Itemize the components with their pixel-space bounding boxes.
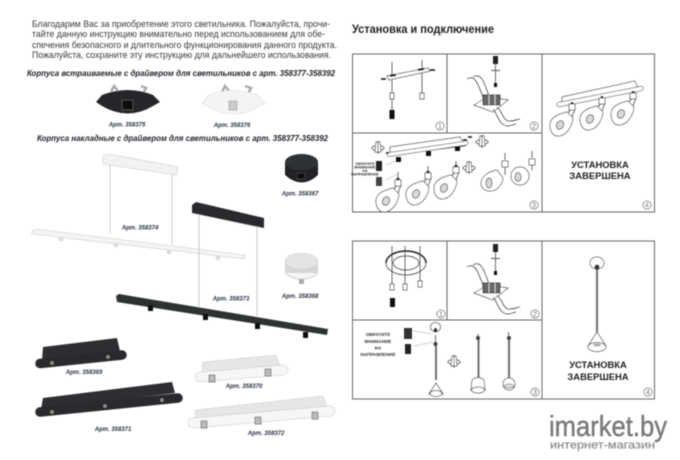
label 358372: Арт. 358372 xyxy=(247,431,285,437)
direction note: ВНИМАНИЕ xyxy=(365,339,391,344)
heading: surface housings: Корпуса накладные с драйвером для светильников с арт. 358377-358392 xyxy=(37,133,328,143)
direction note: НА xyxy=(362,169,368,173)
label 358373: Арт. 358373 xyxy=(212,296,250,302)
panel frame xyxy=(352,241,654,399)
diagram panel: bar installation xyxy=(351,54,654,212)
label 358368: Арт. 358368 xyxy=(281,294,319,300)
label 358367: Арт. 358367 xyxy=(281,192,319,198)
product: black two-spot canopy 358369 xyxy=(40,338,122,366)
step 4: finished: ЗАВЕРШЕНА xyxy=(567,371,629,382)
product: black three-spot canopy 358371 xyxy=(40,382,178,414)
step 3: spots: 3 xyxy=(532,202,536,210)
product: black pendant bar 358373 xyxy=(116,202,328,338)
step 4: finished: 4 xyxy=(646,390,650,396)
step 4: finished xyxy=(567,257,652,396)
direction note: НАПРАВЛЕНИЕ xyxy=(351,172,379,176)
step 1 xyxy=(386,246,445,318)
direction note xyxy=(360,328,433,357)
step 1: 1 xyxy=(438,124,442,130)
product: white puck 358368 xyxy=(285,253,318,284)
step 4: finished: 4 xyxy=(645,202,649,210)
intro paragraph: Благодарим Вас за приобретение этого светильника. Пожалуйста, прочи- xyxy=(32,19,330,29)
step 4: finished xyxy=(550,81,651,210)
step 4: finished: ЗАВЕРШЕНА xyxy=(569,170,631,181)
direction note: НА xyxy=(375,346,382,350)
diagram panel: pendant installation xyxy=(352,241,654,399)
direction note: ОБРАТИТЕ xyxy=(366,332,390,337)
direction note: ВНИМАНИЕ xyxy=(355,166,376,170)
step 4: finished: УСТАНОВКА xyxy=(569,359,627,370)
product: white two-spot canopy 358370 xyxy=(200,355,283,382)
label 358371: Арт. 358371 xyxy=(94,427,132,433)
product: black recessed round housing xyxy=(96,86,160,114)
intro paragraph: Пожалуйста, сохраните эту инструкцию для дальнейшего использования. xyxy=(32,50,331,60)
product: black puck 358367 xyxy=(285,154,318,182)
step 1: 1 xyxy=(439,312,443,318)
left column: products xyxy=(27,19,337,437)
label 358375: Арт. 358375 xyxy=(108,122,146,128)
intro paragraph: спечения безопасного и длительного функционирования данного продукта. xyxy=(32,40,337,50)
step 3: pendants xyxy=(360,322,539,396)
step 1 xyxy=(381,60,444,130)
product: white recessed round housing xyxy=(202,86,265,114)
heading: recessed housings: Корпуса встраиваемые с драйвером для светильников с арт. 358377-358392 xyxy=(27,68,335,78)
step 4: finished: УСТАНОВКА xyxy=(571,159,629,170)
step 2: wiring: 2 xyxy=(533,312,537,318)
label 358376: Арт. 358376 xyxy=(213,123,251,129)
intro paragraph: тайте данную инструкцию внимательно перед использованием для обе- xyxy=(32,29,325,39)
product: white three-spot canopy 358372 xyxy=(193,396,330,428)
right column: installation xyxy=(351,22,667,452)
watermark: imarket.by: imarket.by xyxy=(549,411,667,443)
watermark: imarket.by: интернет-магазин xyxy=(550,440,655,452)
direction note: НАПРАВЛЕНИЕ xyxy=(360,352,396,357)
step 3: pendants: 3 xyxy=(533,390,537,396)
label 358374: Арт. 358374 xyxy=(121,226,159,232)
label 358369: Арт. 358369 xyxy=(65,370,103,376)
product: white pendant bar 358374 xyxy=(32,154,245,260)
direction note xyxy=(351,161,398,186)
direction note: ОБРАТИТЕ xyxy=(355,162,375,166)
intro paragraph xyxy=(32,19,337,60)
step 3: spots xyxy=(351,135,538,212)
step 2: wiring: 2 xyxy=(532,124,536,130)
step 2: wiring xyxy=(467,244,539,318)
panel frame xyxy=(352,54,654,212)
label 358370: Арт. 358370 xyxy=(225,384,263,390)
step 2: wiring xyxy=(467,56,538,130)
heading: installation and connection: Установка и подключение xyxy=(352,22,494,36)
